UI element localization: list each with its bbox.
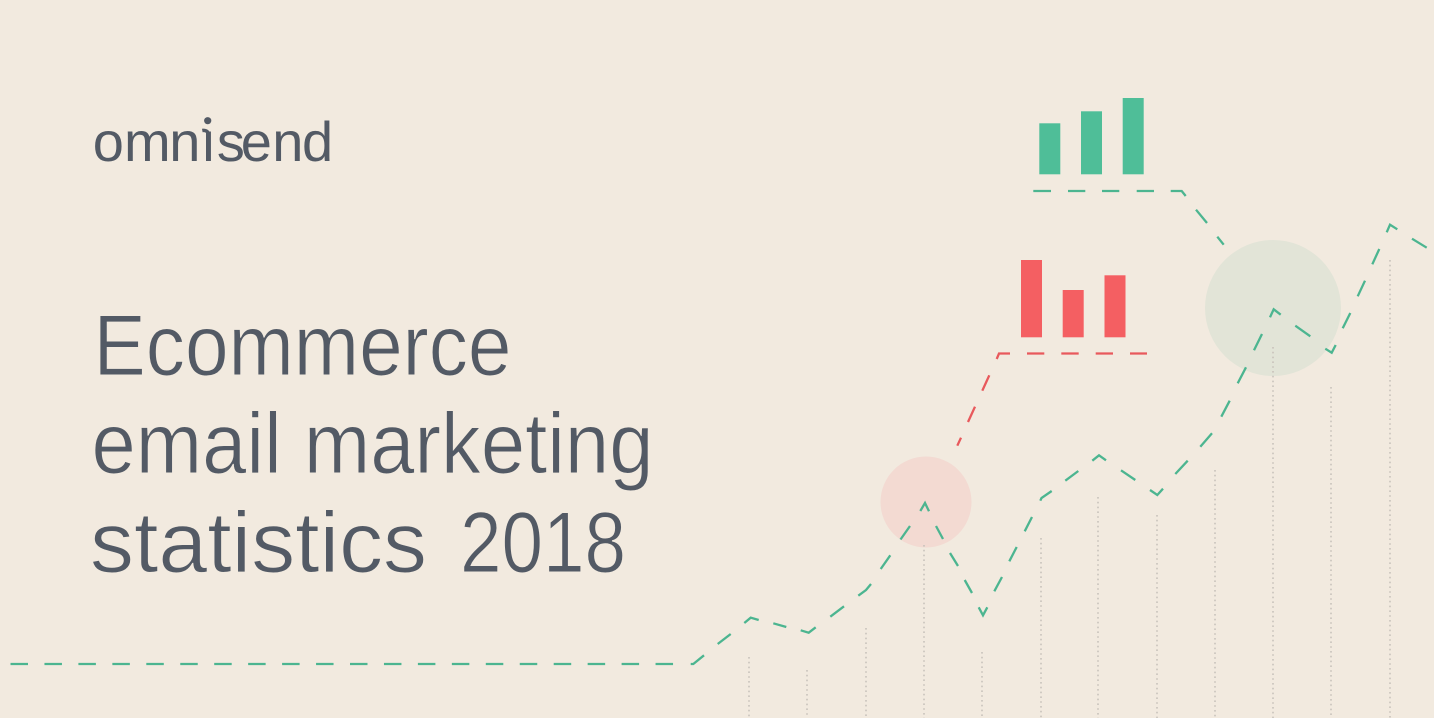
main green dashed trend line — [10, 225, 1427, 664]
logo: omnisend: omnisend — [93, 110, 333, 173]
red bar chart icon — [1021, 260, 1126, 337]
title: 2018 — [460, 495, 626, 591]
green bar chart icon — [1039, 98, 1144, 174]
dotted vertical guides — [749, 260, 1390, 718]
title: email marketing — [92, 396, 654, 492]
red dashed connector — [957, 354, 1147, 446]
highlight circle: red — [880, 456, 972, 548]
highlight circle: green — [1205, 240, 1341, 376]
title: Ecommerce — [94, 298, 512, 394]
title: statistics — [90, 495, 427, 591]
green dashed connector — [1033, 191, 1224, 245]
title — [90, 298, 654, 591]
